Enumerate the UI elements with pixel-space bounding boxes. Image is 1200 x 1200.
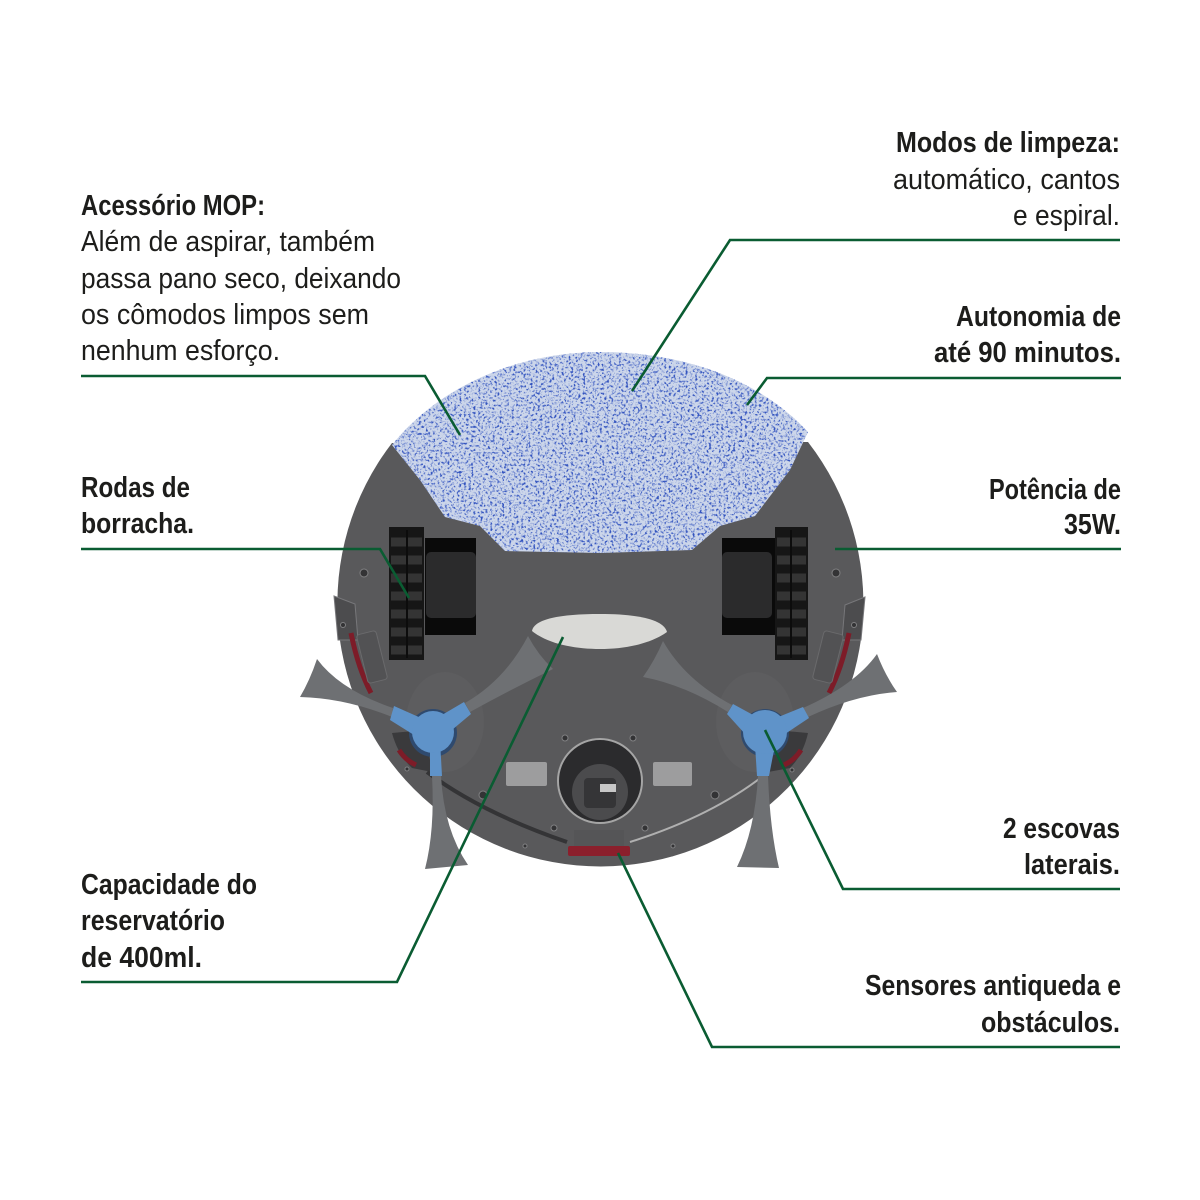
left brush recess bbox=[392, 730, 432, 772]
callout: Rodas de borracha bbox=[81, 472, 409, 598]
right brush housing dome bbox=[716, 672, 794, 772]
bumper seam bbox=[427, 772, 567, 842]
callout: Potência: 35W. bbox=[1064, 509, 1121, 541]
right side flap bbox=[842, 597, 865, 640]
callout: Capacidade do reservatório bbox=[81, 637, 563, 982]
callout: Acessório MOP: Acessório MOP: bbox=[81, 190, 265, 222]
left side flap bbox=[334, 596, 358, 640]
callout: Acessório MOP: nenhum esforço. bbox=[81, 335, 280, 367]
left flap panel bbox=[356, 630, 388, 684]
callout: Sensores: obstáculos. bbox=[981, 1007, 1120, 1039]
callout: Capacidade do reservatório: Capacidade do bbox=[81, 869, 257, 901]
left sensor window bbox=[506, 762, 547, 786]
callout: Potência bbox=[835, 474, 1121, 549]
callout: Capacidade do reservatório: de 400ml. bbox=[81, 942, 202, 974]
callout: Modos de limpeza: Modos de limpeza: bbox=[896, 127, 1120, 159]
callout: 2 escovas laterais: laterais. bbox=[1024, 849, 1120, 881]
water tank window bbox=[532, 614, 667, 649]
callout: Acessório MOP: Além de aspirar, também bbox=[81, 226, 375, 258]
right sensor strip bbox=[784, 633, 849, 765]
callout: Sensores bbox=[618, 853, 1121, 1047]
callout: Sensores: Sensores antiqueda e bbox=[865, 970, 1121, 1002]
right flap panel bbox=[812, 630, 844, 684]
right sensor window bbox=[653, 762, 692, 786]
callout: Rodas de borracha: borracha. bbox=[81, 508, 194, 540]
bumper seam right bbox=[630, 772, 768, 842]
callout: Capacidade do reservatório: reservatório bbox=[81, 905, 225, 937]
callout: Acessório MOP bbox=[81, 190, 460, 435]
callout: 2 escovas laterais: 2 escovas bbox=[1003, 813, 1120, 845]
callout: Acessório MOP: passa pano seco, deixando bbox=[81, 263, 401, 295]
callout: Acessório MOP: os cômodos limpos sem bbox=[81, 299, 369, 331]
left brush housing dome bbox=[406, 672, 484, 772]
right brush recess bbox=[768, 730, 808, 772]
left wheel bbox=[389, 527, 476, 660]
central caster wheel bbox=[558, 739, 642, 823]
robot body bbox=[337, 442, 863, 866]
callout: 2 escovas laterais bbox=[765, 730, 1120, 889]
callout: Modos de limpeza: e espiral. bbox=[1013, 200, 1120, 232]
callout: Autonomia bbox=[747, 301, 1121, 405]
callout: Rodas de borracha: Rodas de bbox=[81, 472, 190, 504]
robot vacuum underside bbox=[300, 352, 897, 869]
left side brush bbox=[300, 636, 553, 869]
front cliff sensor bbox=[568, 830, 630, 856]
left sensor strip bbox=[351, 633, 416, 765]
callout: Modos de limpeza bbox=[632, 127, 1120, 391]
callout: Autonomia: até 90 minutos. bbox=[934, 337, 1121, 369]
mop pad bbox=[392, 352, 808, 553]
right side brush bbox=[643, 641, 897, 868]
callout: Autonomia: Autonomia de bbox=[956, 301, 1121, 333]
screws bbox=[340, 569, 856, 848]
right wheel bbox=[722, 527, 808, 660]
callout: Potência: Potência de bbox=[989, 474, 1121, 506]
callout: Modos de limpeza: automático, cantos bbox=[893, 164, 1120, 196]
